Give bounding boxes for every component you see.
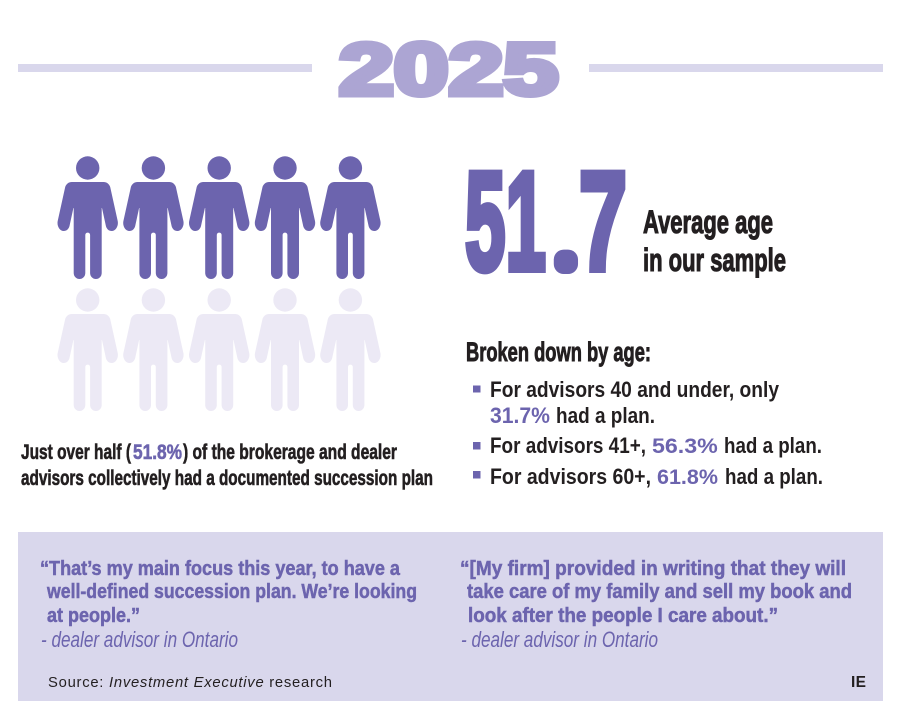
quote: left: - dealer advisor in Ontario [41, 627, 238, 652]
text block: pictogram caption: Just over half ( [21, 441, 131, 464]
list item: 40 and under [473, 377, 780, 428]
quote: left: well-defined succession plan. We’re looking [46, 580, 417, 603]
list: plan rates by age group [473, 377, 823, 489]
big number: average age: . [562, 238, 570, 271]
list item: 40 and under: For advisors 40 and under, only [490, 377, 780, 402]
source line: Source: Investment Executive research [48, 675, 332, 691]
title: 2025 with side rules [18, 29, 883, 110]
text block: pictogram caption: ) of the brokerage and dealer [183, 441, 397, 464]
icon row: pale people [58, 288, 381, 411]
quote: right: look after the people I care about.” [468, 604, 778, 627]
list item: 60 plus: 61.8% [657, 465, 718, 489]
quote: right [460, 557, 852, 652]
list item: 60 plus [473, 464, 823, 489]
quote: left: at people.” [47, 604, 140, 627]
panel: quotes and source [18, 532, 883, 701]
text block: pictogram caption: 51.8% [133, 441, 182, 464]
icon row: filled people [58, 156, 381, 279]
quote: left [40, 557, 417, 652]
label: average age in our sample [643, 204, 786, 278]
quote: right: take care of my family and sell my book and [467, 580, 852, 603]
text block: pictogram caption: advisors collectively had a documented succession plan [21, 467, 433, 490]
list item: 41 plus [473, 433, 822, 458]
pictogram: ten people, five highlighted [58, 156, 381, 411]
big number: average age: 7 [579, 142, 627, 300]
list item: 40 and under: 31.7% [490, 403, 550, 428]
big number: average age: 51 [465, 142, 546, 300]
quote: right: - dealer advisor in Ontario [461, 627, 658, 652]
label: average age in our sample: in our sample [643, 242, 786, 278]
title: 2025 with side rules: 2025 [339, 29, 558, 110]
list item: 60 plus: For advisors 60+, [490, 464, 651, 489]
list item: 41 plus: For advisors 41+, [490, 433, 646, 458]
quote: right: “[My firm] provided in writing that they will [460, 557, 846, 580]
quote: left: “That’s my main focus this year, to have a [40, 557, 401, 580]
list item: 60 plus: had a plan. [725, 464, 823, 489]
logo: IE: IE [851, 674, 866, 691]
label: average age in our sample: Average age [643, 204, 773, 240]
list item: 41 plus: had a plan. [724, 433, 822, 458]
list item: 40 and under: had a plan. [556, 403, 655, 428]
heading: broken down by age: Broken down by age: [466, 337, 651, 367]
list item: 41 plus: 56.3% [652, 434, 718, 458]
text block: pictogram caption [21, 441, 433, 490]
